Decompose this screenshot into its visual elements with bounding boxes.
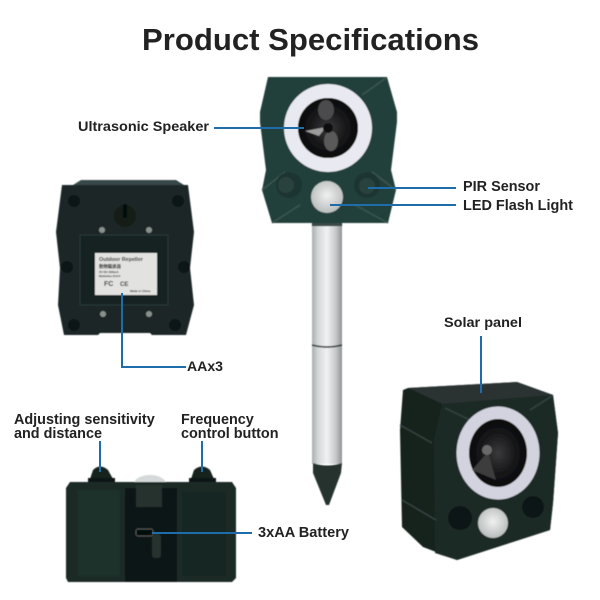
product label: 5V DC 600mA [99,270,119,274]
product label: FC [104,281,113,288]
title: Product Specifications [142,23,479,57]
back device [56,180,194,335]
label: adjusting sensitivity: and distance [14,426,102,442]
right knob [189,466,216,482]
label: PIR sensor: PIR Sensor [463,179,540,195]
product label: Made in China [130,289,151,293]
label: 3xAA battery: 3xAA Battery [258,525,349,541]
product label [95,253,157,295]
keyhole mount [114,204,136,227]
LED ring [291,91,365,165]
label: solar panel: Solar panel [444,314,522,330]
PIR sensor dome [311,181,343,213]
product label: Batteries:2xAA [99,274,121,278]
callout lines [100,128,481,533]
product label: CE [120,282,128,288]
solar device [400,382,558,560]
product label: 動物驅退器 [99,263,122,270]
dome [134,475,166,493]
battery cover [80,235,168,305]
label: LED flash light: LED Flash Light [463,198,573,214]
right knob [354,172,380,198]
speaker cone [469,419,527,487]
LED ring [463,413,533,493]
label: adjusting sensitivity: Adjusting sensitivity [14,412,155,428]
left knob [276,172,302,198]
label: frequency control: Frequency [181,412,254,428]
PIR sensor dome [478,508,508,538]
front device [260,77,397,226]
label: frequency control: control button [181,426,279,442]
speaker cone [298,98,358,158]
right knob [522,496,544,518]
left knob [448,506,472,530]
product label: Outdoor Repeller [99,257,144,263]
label: AAx3: AAx3 [187,358,223,374]
screws and feet [61,195,190,331]
bottom device [66,466,236,582]
label: ultrasonic speaker: Ultrasonic Speaker [78,118,210,134]
left knob [88,466,115,482]
USB port [136,529,161,558]
stake pole [312,223,342,505]
